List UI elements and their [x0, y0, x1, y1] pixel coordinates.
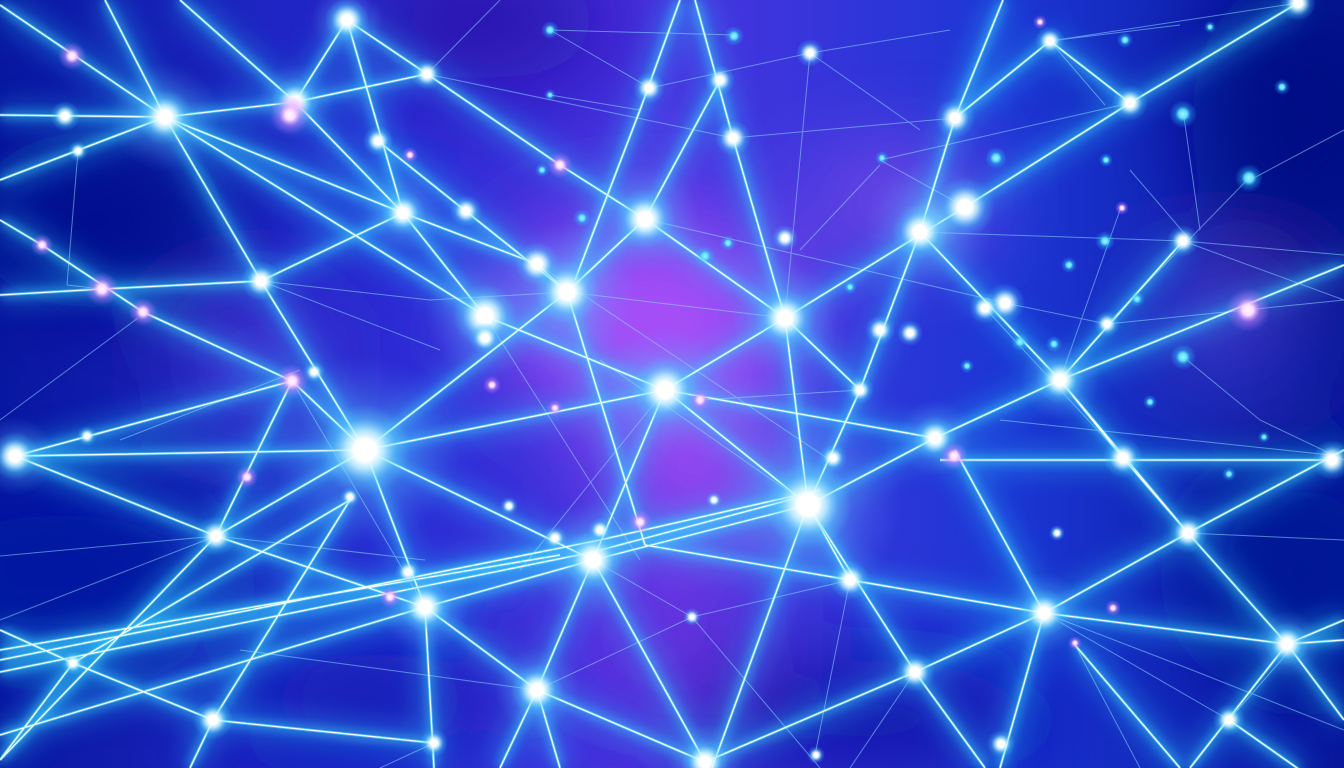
cyan accent nodes — [535, 21, 1290, 481]
pink accent nodes — [31, 15, 1270, 650]
